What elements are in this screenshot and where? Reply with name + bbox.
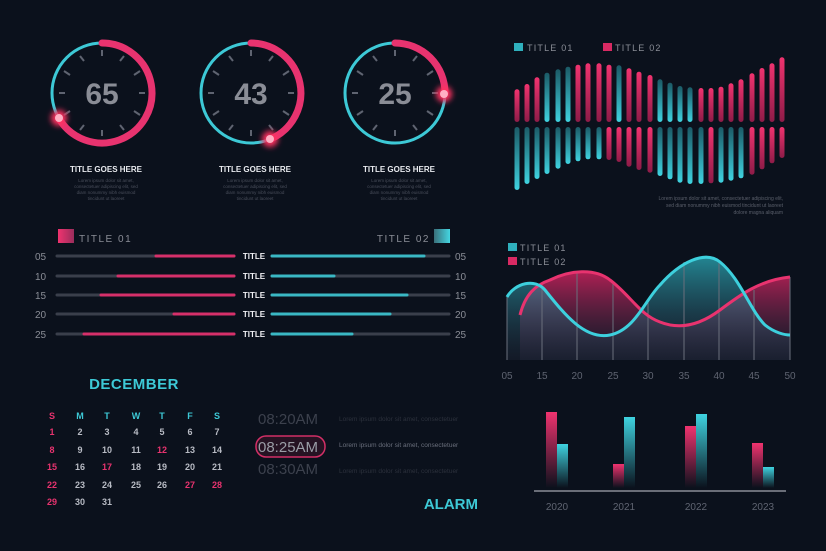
legend: line chart: TITLE 01 xyxy=(520,243,567,253)
alarm panel: Lorem ipsum dolor sit amet, consectetuer xyxy=(339,442,459,449)
calendar: 24 xyxy=(102,480,112,490)
column chart by year xyxy=(534,412,786,513)
horizontal bar chart: 10 xyxy=(455,272,467,283)
wave bar chart xyxy=(514,43,784,216)
calendar: 20 xyxy=(185,462,195,472)
calendar: 26 xyxy=(157,480,167,490)
calendar: 15 xyxy=(47,462,57,472)
calendar: DECEMBER xyxy=(89,376,179,393)
legend: wave bars: TITLE 01 xyxy=(527,43,574,53)
alarm panel: 08:25AM xyxy=(258,439,318,456)
calendar: 29 xyxy=(47,497,57,507)
line chart: 30 xyxy=(642,371,654,382)
gauge captions: tincidunt ut laoreet xyxy=(237,196,274,201)
horizontal bar chart: 20 xyxy=(455,310,467,321)
line chart: 05 xyxy=(501,371,513,382)
calendar: 5 xyxy=(159,427,165,437)
calendar: 6 xyxy=(187,427,193,437)
line chart: 45 xyxy=(748,371,760,382)
line chart: 50 xyxy=(784,371,796,382)
line chart xyxy=(501,243,796,382)
horizontal bar chart: TITLE xyxy=(243,252,266,261)
calendar: 13 xyxy=(185,445,195,455)
wave caption: dolore magna aliquam xyxy=(734,210,783,216)
column chart by year: 2020 xyxy=(546,502,569,513)
gauge captions: tincidunt ut laoreet xyxy=(381,196,418,201)
calendar: 2 xyxy=(77,427,83,437)
calendar: 16 xyxy=(75,462,85,472)
calendar: T xyxy=(159,411,165,421)
gauge captions: tincidunt ut laoreet xyxy=(88,196,125,201)
column chart by year: 2023 xyxy=(752,502,775,513)
calendar: 22 xyxy=(47,480,57,490)
calendar: 19 xyxy=(157,462,167,472)
horizontal bar chart: TITLE xyxy=(243,272,266,281)
horizontal bar chart: 25 xyxy=(455,330,467,341)
calendar: 25 xyxy=(131,480,141,490)
horizontal bar chart: 10 xyxy=(35,272,47,283)
calendar: 1 xyxy=(49,427,55,437)
legend: line chart: TITLE 02 xyxy=(520,257,567,267)
gauge: 43: 43 xyxy=(234,78,268,111)
calendar: T xyxy=(104,411,110,421)
line chart: 20 xyxy=(571,371,583,382)
calendar: 4 xyxy=(133,427,139,437)
horizontal bar chart xyxy=(35,229,467,341)
calendar xyxy=(47,376,222,507)
calendar: 17 xyxy=(102,462,112,472)
gauge: 25 xyxy=(345,43,452,143)
gauge captions: diam nonummy nibh euismod xyxy=(226,190,285,195)
calendar: 28 xyxy=(212,480,222,490)
calendar: 9 xyxy=(77,445,83,455)
horizontal bar chart: 15 xyxy=(455,291,467,302)
alarm panel: Lorem ipsum dolor sit amet, consectetuer xyxy=(339,468,459,475)
alarm panel: 08:20AM xyxy=(258,411,318,428)
gauge captions: Lorem ipsum dolor sit amet, xyxy=(78,178,134,183)
gauge: 25: 25 xyxy=(378,78,412,111)
gauge captions: TITLE GOES HERE xyxy=(70,165,143,174)
calendar: S xyxy=(49,411,55,421)
calendar: M xyxy=(76,411,84,421)
horizontal bar chart: 15 xyxy=(35,291,47,302)
gauge: 65: 65 xyxy=(85,78,119,111)
calendar: 11 xyxy=(131,445,141,455)
horizontal bar chart: 20 xyxy=(35,310,47,321)
gauge captions: consectetuer adipiscing elit, sed xyxy=(367,184,431,189)
gauge captions: consectetuer adipiscing elit, sed xyxy=(74,184,138,189)
alarm panel: ALARM xyxy=(424,496,478,513)
legend: line chart xyxy=(508,243,567,267)
calendar: 10 xyxy=(102,445,112,455)
calendar: 18 xyxy=(131,462,141,472)
alarm panel: 08:30AM xyxy=(258,461,318,478)
gauge: 65 xyxy=(51,43,152,143)
calendar: 12 xyxy=(157,445,167,455)
gauge captions: diam nonummy nibh euismod xyxy=(370,190,429,195)
legend: title 02: TITLE 02 xyxy=(377,234,430,245)
gauge captions: consectetuer adipiscing elit, sed xyxy=(223,184,287,189)
horizontal bar chart: 05 xyxy=(455,252,467,263)
alarm panel xyxy=(256,411,478,513)
gauge captions: Lorem ipsum dolor sit amet, xyxy=(371,178,427,183)
line chart: 35 xyxy=(678,371,690,382)
column chart by year: 2021 xyxy=(613,502,636,513)
gauge: 43 xyxy=(201,43,301,147)
gauge captions: diam nonummy nibh euismod xyxy=(77,190,136,195)
wave caption xyxy=(658,196,784,216)
calendar: 8 xyxy=(49,445,55,455)
calendar: 31 xyxy=(102,497,112,507)
horizontal bar chart: TITLE xyxy=(243,310,266,319)
line chart: 40 xyxy=(713,371,725,382)
legend: wave bars: TITLE 02 xyxy=(615,43,662,53)
horizontal bar chart: TITLE xyxy=(243,330,266,339)
gauge captions: TITLE GOES HERE xyxy=(363,165,436,174)
legend: title 01 xyxy=(58,229,132,245)
calendar: 27 xyxy=(185,480,195,490)
horizontal bar chart: 05 xyxy=(35,252,47,263)
horizontal bar chart: TITLE xyxy=(243,291,266,300)
calendar: F xyxy=(187,411,193,421)
wave caption: sed diam nonummy nibh euismod tincidunt ut laoreet xyxy=(666,203,784,209)
calendar: S xyxy=(214,411,220,421)
calendar: 21 xyxy=(212,462,222,472)
legend: wave bars xyxy=(514,43,662,53)
alarm panel: Lorem ipsum dolor sit amet, consectetuer xyxy=(339,416,459,423)
line chart: 25 xyxy=(607,371,619,382)
calendar: 3 xyxy=(104,427,110,437)
calendar: 14 xyxy=(212,445,222,455)
wave caption: Lorem ipsum dolor sit amet, consectetuer adipiscing elit, xyxy=(658,196,783,202)
line chart: 15 xyxy=(536,371,548,382)
gauge captions: Lorem ipsum dolor sit amet, xyxy=(227,178,283,183)
column chart by year: 2022 xyxy=(685,502,708,513)
legend: title 02 xyxy=(377,229,450,245)
calendar: 23 xyxy=(75,480,85,490)
calendar: 30 xyxy=(75,497,85,507)
calendar: 7 xyxy=(214,427,220,437)
calendar: W xyxy=(132,411,141,421)
gauge captions xyxy=(70,165,436,201)
legend: title 01: TITLE 01 xyxy=(79,234,132,245)
horizontal bar chart: 25 xyxy=(35,330,47,341)
gauge captions: TITLE GOES HERE xyxy=(219,165,292,174)
